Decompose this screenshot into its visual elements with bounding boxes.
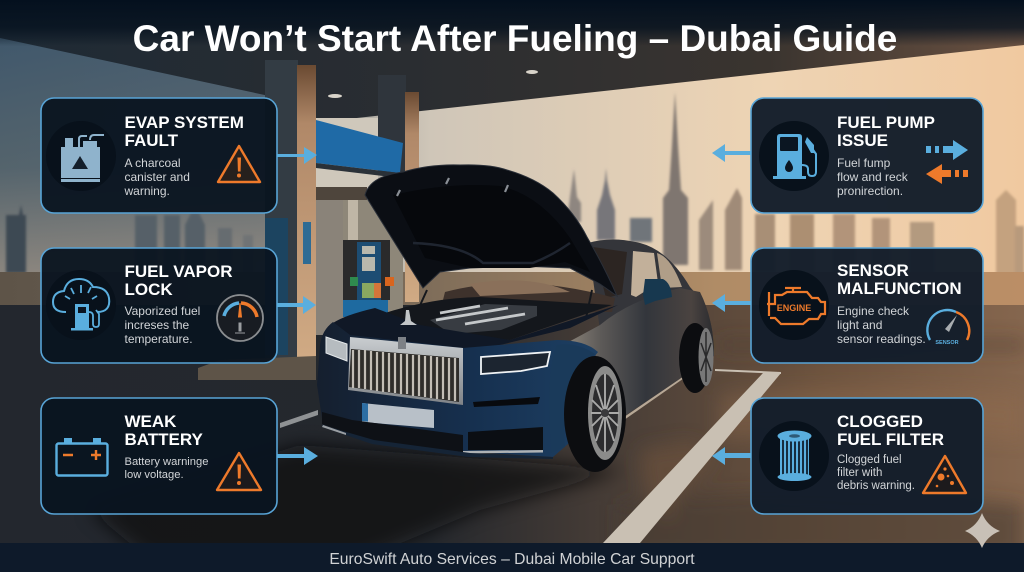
heading: FUEL VAPOR <box>124 262 232 281</box>
mascot <box>400 310 417 325</box>
panel: clogged fuel filter <box>751 398 983 514</box>
heading: BATTERY <box>124 430 204 449</box>
arrow: filter to car <box>712 447 751 465</box>
panel: EVAP system fault <box>41 98 277 213</box>
icon: battery <box>56 438 108 476</box>
skyline right <box>567 92 1024 276</box>
description: A charcoal <box>124 156 181 170</box>
panel: sensor malfunction <box>751 248 983 363</box>
arrow: vapor lock to car <box>277 296 316 314</box>
description: sensor readings. <box>837 332 926 346</box>
heading: FUEL PUMP <box>837 113 935 132</box>
arrow: fuel pump to car <box>712 144 751 162</box>
description: Clogged fuel <box>837 454 902 466</box>
description: canister and <box>124 170 190 184</box>
license plate <box>362 403 434 428</box>
panel: fuel pump issue <box>751 98 983 213</box>
lower bumper <box>322 412 463 452</box>
description: temperature. <box>124 332 193 346</box>
icon: sensor gauge: SENSOR <box>935 340 959 346</box>
icon: flow arrows <box>926 140 968 184</box>
right headlight <box>481 352 550 374</box>
heading: FUEL FILTER <box>837 430 944 449</box>
heading: MALFUNCTION <box>837 279 962 298</box>
icon: temperature gauge <box>217 295 263 341</box>
front body <box>317 322 598 457</box>
car <box>317 165 714 472</box>
gas station pillars, sign and pump <box>198 60 419 380</box>
icon: fuel filter <box>759 421 829 491</box>
icon: debris warning <box>923 456 966 493</box>
description: increses the <box>124 318 190 332</box>
description: debris warning. <box>837 480 915 492</box>
front wheel <box>564 356 626 472</box>
windscreen under hood <box>440 283 615 312</box>
panel: fuel vapor lock <box>41 248 277 363</box>
description: low voltage. <box>124 469 184 481</box>
arrow: battery to car <box>277 447 318 465</box>
description: flow and reck <box>837 170 909 184</box>
bonnet <box>333 305 618 350</box>
side body <box>563 288 714 417</box>
icon: vapor cloud and pump <box>46 270 116 340</box>
gas station canopy <box>0 0 1024 122</box>
heading: FAULT <box>124 131 179 150</box>
heading: LOCK <box>124 280 173 299</box>
heading: WEAK <box>124 412 177 431</box>
grille <box>348 337 463 405</box>
description: filter with <box>837 467 882 479</box>
title: Car Won’t Start After Fueling – Dubai Guide <box>133 18 897 59</box>
road shading <box>90 340 1024 560</box>
description: Engine check <box>837 304 910 318</box>
parking lines <box>280 369 781 543</box>
icon: fuel pump <box>759 121 829 191</box>
arrow: EVAP to car <box>277 147 317 164</box>
description: light and <box>837 318 882 332</box>
rear body and roof <box>588 240 714 417</box>
description: Fuel fump <box>837 156 891 170</box>
heading: EVAP SYSTEM <box>124 113 244 132</box>
heading: SENSOR <box>837 261 909 280</box>
skyline left <box>6 205 253 275</box>
icon: check engine <box>759 270 829 340</box>
engine bay <box>360 297 612 340</box>
footer bar <box>0 543 1024 572</box>
left headlight <box>326 337 347 361</box>
icon: charcoal canister <box>46 121 116 191</box>
description: pronirection. <box>837 184 903 198</box>
icon: sensor gauge <box>927 310 969 346</box>
icon: warning triangle <box>217 453 261 490</box>
open hood <box>365 165 617 296</box>
rear wheel <box>679 323 714 393</box>
heading: CLOGGED <box>837 412 923 431</box>
heading: ISSUE <box>837 131 888 150</box>
icon: sparkle <box>965 513 1000 548</box>
footer bar: EuroSwift Auto Services – Dubai Mobile Car Support <box>329 551 695 568</box>
description: Battery warninge <box>124 456 208 468</box>
arrow: sensor to car <box>712 294 751 312</box>
icon: warning triangle <box>218 146 260 182</box>
description: Vaporized fuel <box>124 304 200 318</box>
panel: weak battery <box>41 398 277 514</box>
description: warning. <box>124 184 170 198</box>
icon: check engine: ENGINE <box>777 303 811 313</box>
